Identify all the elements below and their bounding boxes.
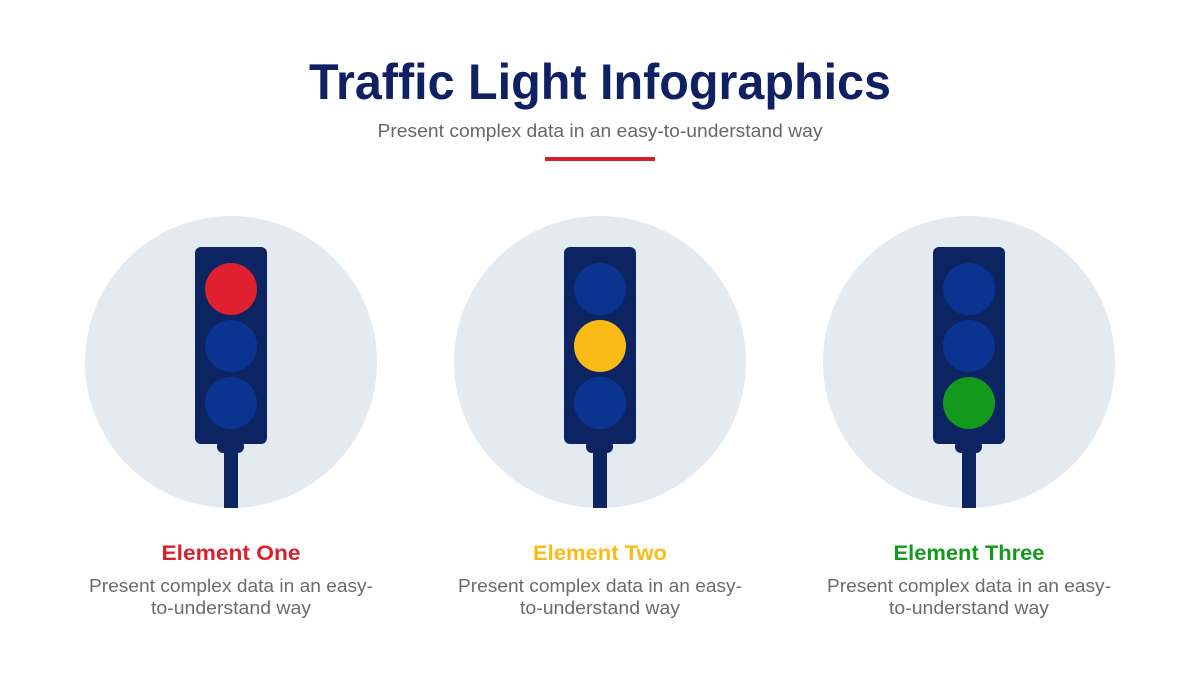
traffic light one	[195, 247, 267, 508]
text three: to-understand way	[889, 598, 1049, 618]
text three: Present complex data in an easy-	[827, 576, 1111, 596]
background circle three	[823, 216, 1115, 508]
text two: to-understand way	[520, 598, 680, 618]
text one: Present complex data in an easy-	[89, 576, 373, 596]
panel: element two	[454, 216, 746, 618]
heading one: Element One	[162, 542, 300, 565]
subtitle: Present complex data in an easy-to-understand way	[378, 121, 822, 141]
traffic light three	[933, 247, 1005, 508]
title underline	[545, 157, 655, 161]
panel: element three	[823, 216, 1115, 618]
text one: to-understand way	[151, 598, 311, 618]
heading two: Element Two	[533, 542, 667, 565]
background circle two	[454, 216, 746, 508]
traffic light two	[564, 247, 636, 508]
background circle one	[85, 216, 377, 508]
title: Traffic Light Infographics	[309, 54, 891, 110]
heading three: Element Three	[894, 542, 1044, 565]
panel: element one	[85, 216, 377, 618]
text two: Present complex data in an easy-	[458, 576, 742, 596]
